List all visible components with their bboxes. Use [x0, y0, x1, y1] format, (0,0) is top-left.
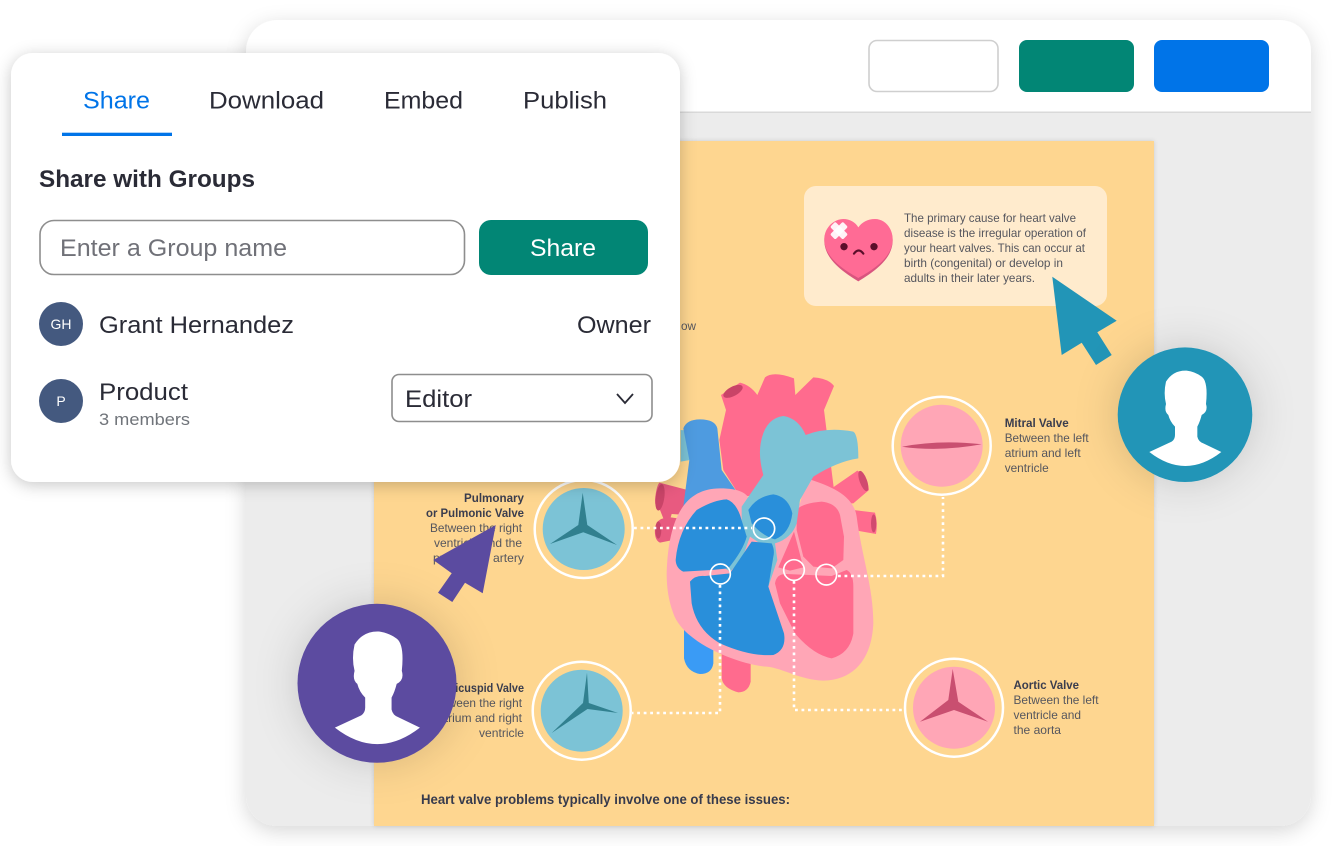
heart wall: [667, 478, 873, 681]
member row: Grant Hernandez: Owner: [577, 312, 651, 339]
tricuspid label: atrium and right: [438, 711, 523, 725]
callout text: disease is the irregular operation of: [904, 226, 1087, 240]
toolbar button: green: [1019, 40, 1134, 92]
aortic label: ventricle and: [1014, 708, 1081, 722]
avatar: teal user: [1118, 347, 1252, 482]
role dropdown: Editor: [405, 386, 472, 413]
cursor: purple: [433, 525, 496, 602]
member row: Product: P: [56, 393, 66, 409]
pulmonary label: or Pulmonic Valve: [426, 506, 524, 520]
infographic subheading: Heart valve problems typically involve one of these issues:: [421, 792, 790, 807]
tabs: Share: [83, 88, 150, 114]
valve: pulmonary: [426, 480, 633, 578]
tabs: Publish: [523, 88, 607, 114]
toolbar button: white: [869, 40, 998, 92]
member row: Product: [39, 379, 190, 429]
callout text: adults in their later years.: [904, 271, 1035, 285]
toolbar button: blue: [1154, 40, 1269, 92]
icon: sad heart with bandage: [824, 219, 893, 281]
tricuspid label: Between the right: [430, 696, 523, 710]
right atrium: [676, 499, 747, 572]
tabs: [62, 88, 607, 136]
valve: mitral: [893, 397, 1089, 495]
avatar: purple user: [298, 604, 456, 763]
member row: Grant Hernandez: Grant Hernandez: [99, 312, 294, 339]
right ventricle: [690, 542, 784, 655]
share button: Share: [530, 235, 596, 262]
callout: primary cause: [804, 186, 1107, 306]
infographic page: [374, 141, 1154, 826]
mitral label: Mitral Valve: [1005, 416, 1069, 430]
left ventricle: [775, 570, 853, 658]
callout text: The primary cause for heart valve: [904, 211, 1076, 225]
superior vena cava: [681, 430, 690, 462]
pulmonary trunk interior: [748, 494, 792, 539]
aortic label: the aorta: [1014, 723, 1061, 737]
heart diagram: [654, 374, 877, 692]
tricuspid label: ventricle: [479, 726, 524, 740]
mitral label: Between the left: [1005, 431, 1089, 445]
mitral label: [1005, 416, 1089, 475]
callout text: birth (congenital) or develop in: [904, 256, 1063, 270]
valve: tricuspid: [430, 662, 631, 760]
cursor: teal: [1052, 277, 1117, 365]
pulmonary label: ventricle and the: [434, 536, 522, 550]
aorta: [719, 374, 834, 497]
callout text: your heart valves. This can occur at: [904, 241, 1086, 255]
valve: aortic: [905, 659, 1099, 757]
left atrium, inner: [797, 502, 844, 568]
share button: [479, 220, 648, 275]
aortic label: Aortic Valve: [1014, 678, 1079, 692]
aortic label: [1014, 678, 1099, 737]
tabs: Embed: [384, 88, 463, 114]
descending aorta: [722, 653, 751, 692]
member row: Grant Hernandez: [39, 302, 651, 346]
editor window: [246, 20, 1311, 826]
dotted connector lines: [632, 497, 943, 713]
partially hidden text: ow: [681, 319, 696, 333]
group name input: Enter a Group name: [60, 235, 287, 262]
valve markers: [710, 518, 837, 585]
mitral label: atrium and left: [1005, 446, 1081, 460]
member row: Product: Product: [99, 379, 188, 406]
aortic label: Between the left: [1014, 693, 1099, 707]
member row: Grant Hernandez: GH: [50, 316, 72, 332]
pulmonary label: [426, 491, 524, 565]
group name input: [40, 220, 464, 274]
pulmonary label: Pulmonary: [464, 491, 524, 505]
mitral label: ventricle: [1005, 461, 1049, 475]
tricuspid label: Tricuspid Valve: [445, 681, 524, 695]
tricuspid label: [430, 681, 524, 740]
role dropdown: [392, 374, 652, 422]
lower vena cava: [684, 620, 713, 674]
tabs: Download: [209, 88, 324, 114]
window toolbar: [246, 20, 1311, 113]
left pulmonary veins: [655, 483, 690, 543]
pulmonary label: Between the right: [430, 521, 523, 535]
section heading: Share with Groups: [39, 166, 255, 193]
pulmonary artery: [725, 416, 858, 587]
callout text: [904, 211, 1087, 285]
right pulmonary veins: [832, 471, 869, 503]
pulmonary label: pulmonary artery: [433, 551, 524, 565]
member row: Product: 3 members: [99, 410, 190, 429]
share panel: [11, 53, 680, 482]
